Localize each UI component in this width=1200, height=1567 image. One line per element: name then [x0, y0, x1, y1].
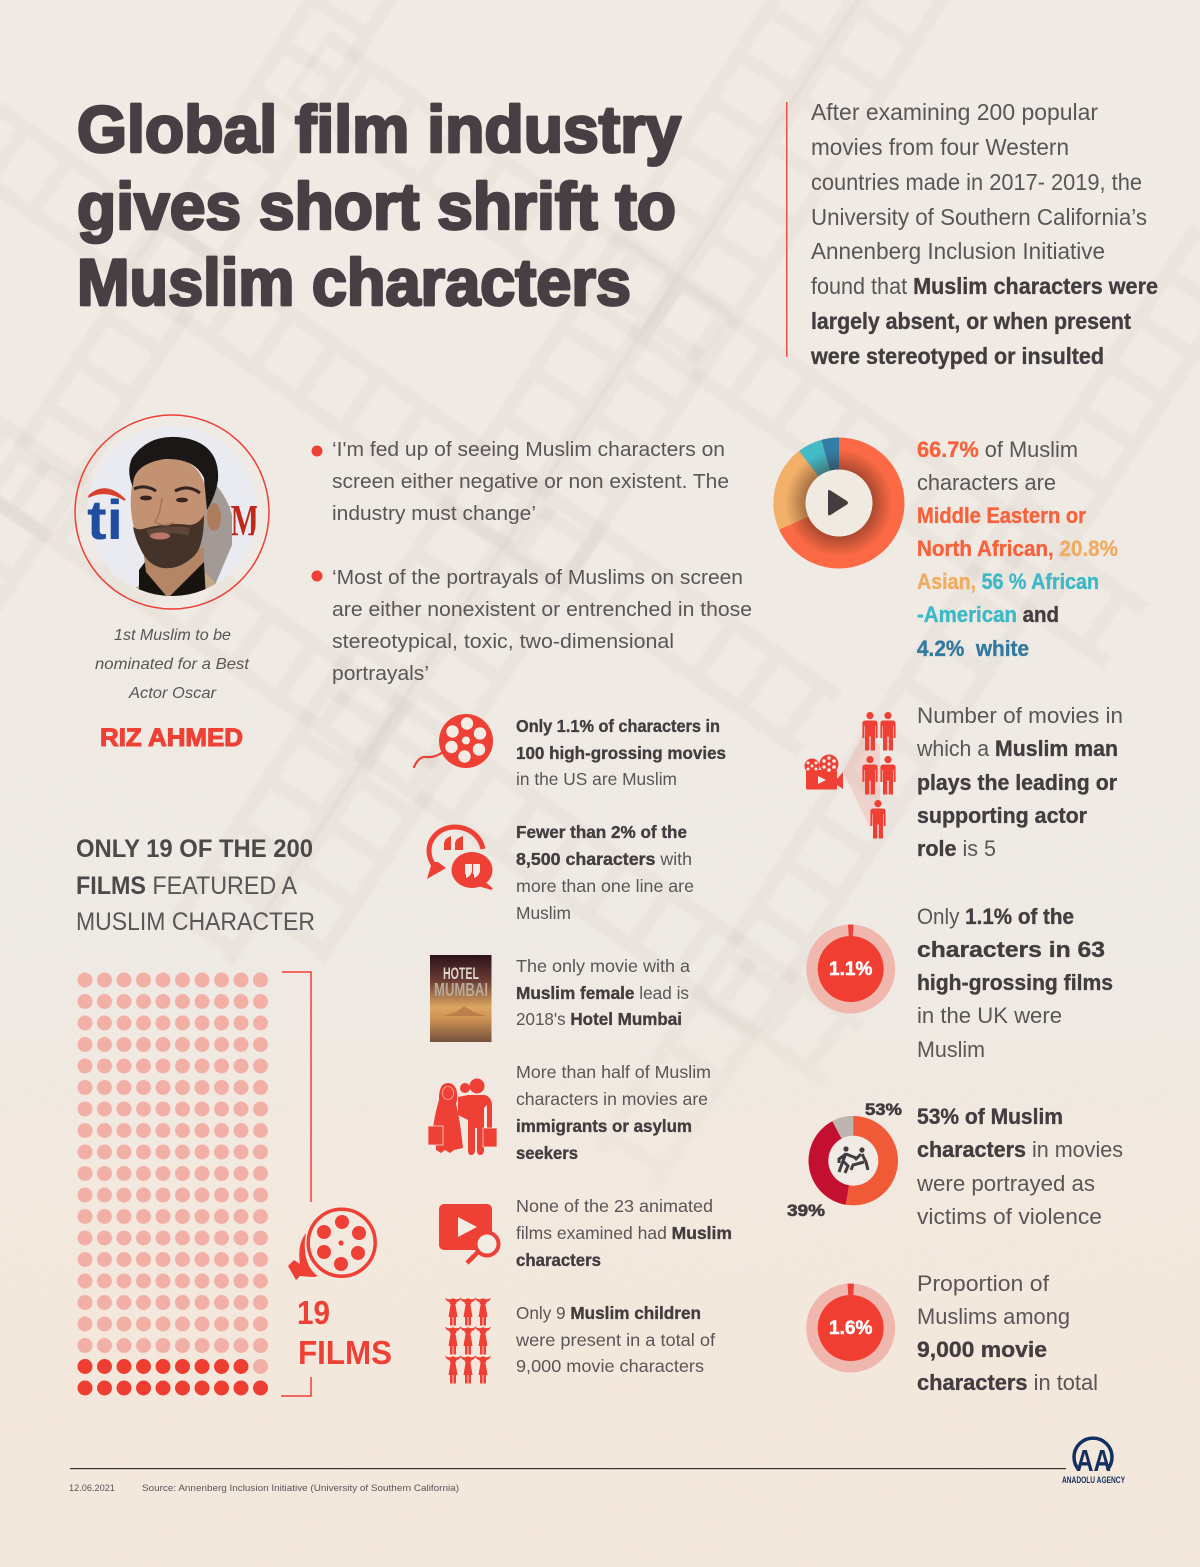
text: UK films: characters in 63 — [917, 937, 1105, 962]
text: US high-grossing: in the US are Muslim — [516, 769, 677, 789]
ethnicity text: -American and — [917, 602, 1059, 627]
ethnicity text: characters are — [917, 470, 1056, 495]
quotes: stereotypical, toxic, two-dimensional — [332, 631, 674, 653]
ethnicity text: North African, 20.8% — [917, 536, 1118, 561]
icon: video search — [439, 1204, 498, 1263]
text: violence: 53% of Muslim — [917, 1104, 1063, 1129]
heading: only 19 of 200 films: FILMS FEATURED A — [76, 872, 297, 900]
text: violence: victims of violence — [917, 1204, 1102, 1229]
donut: 1.1%: 1.1% — [829, 959, 872, 980]
caption: Riz Ahmed: nominated for a Best — [95, 656, 250, 673]
title: Muslim characters — [77, 245, 631, 319]
text: violence: characters in movies — [917, 1137, 1123, 1162]
text: immigrants: More than half of Muslim — [516, 1062, 711, 1082]
logo: Anadolu Agency — [1062, 1438, 1125, 1485]
text: Muslim female lead: The only movie with a — [516, 956, 690, 976]
intro text block: countries made in 2017- 2019, the — [811, 169, 1142, 195]
text: US high-grossing — [516, 716, 726, 789]
label: 19 films: FILMS — [298, 1334, 392, 1371]
intro text block: movies from four Western — [811, 134, 1069, 160]
bracket — [281, 972, 311, 1396]
footer source line: 12.06.2021 — [69, 1483, 115, 1494]
footer source line — [69, 1468, 1066, 1494]
logo: Anadolu Agency: AA — [1076, 1443, 1111, 1478]
intro text block — [786, 99, 1158, 369]
text: UK films: Only 1.1% of the — [917, 904, 1074, 929]
text: 8,500 characters: Fewer than 2% of the — [516, 822, 687, 842]
intro text block: After examining 200 popular — [811, 99, 1098, 125]
text: Muslim female lead — [516, 956, 690, 1029]
quotes — [312, 439, 752, 685]
text: Muslim female lead: Muslim female lead is — [516, 983, 689, 1003]
text: UK films — [917, 904, 1113, 1062]
text: proportion: characters in total — [917, 1370, 1098, 1395]
ethnicity text: 4.2% white — [917, 636, 1029, 661]
quotes: portrayals’ — [332, 663, 429, 685]
icon: film camera with five people — [804, 712, 896, 838]
donut: 1.6% — [806, 1284, 895, 1372]
text: Muslim man leading role: Number of movies in — [917, 703, 1123, 728]
ethnicity text: Middle Eastern or — [917, 503, 1086, 528]
quotes: are either nonexistent or entrenched in those — [332, 599, 752, 621]
text: animated films — [516, 1196, 732, 1270]
quotes: ‘Most of the portrayals of Muslims on screen — [332, 567, 743, 589]
text: proportion: Proportion of — [917, 1271, 1050, 1296]
poster: Hotel Mumbai: HOTEL — [443, 964, 479, 983]
text: Muslim man leading role — [916, 703, 1123, 861]
text: Muslim man leading role: supporting actor — [917, 803, 1087, 828]
intro text block: largely absent, or when present — [811, 308, 1131, 334]
icon: fighting figures — [839, 1146, 868, 1173]
donut: victims of violence: 53% — [865, 1100, 902, 1119]
text: animated films: films examined had Muslim — [516, 1223, 732, 1243]
dot matrix: 200 films — [75, 969, 270, 1396]
portrait photo: IM — [219, 496, 259, 545]
title: gives short shrift to — [77, 169, 676, 243]
portrait photo — [75, 415, 270, 610]
icon: film reel in hand — [288, 1209, 375, 1280]
text: Muslim children — [515, 1303, 715, 1376]
text: UK films: in the UK were — [917, 1003, 1062, 1028]
quotes: ‘I'm fed up of seeing Muslim characters on — [332, 439, 725, 461]
donut: 1.6%: 1.6% — [829, 1318, 872, 1339]
heading: only 19 of 200 films — [76, 835, 315, 936]
poster: Hotel Mumbai: MUMBAI — [434, 980, 488, 1000]
text: Muslim children: were present in a total of — [515, 1330, 715, 1350]
text: US high-grossing: Only 1.1% of characters in — [516, 716, 720, 736]
text: Muslim female lead: 2018's Hotel Mumbai — [516, 1009, 682, 1029]
ethnicity text — [917, 437, 1118, 661]
text: US high-grossing: 100 high-grossing movies — [516, 743, 726, 763]
donut chart: ethnicity with play button — [774, 438, 904, 568]
donut: 1.1% — [806, 924, 895, 1014]
heading: only 19 of 200 films: ONLY 19 OF THE 200 — [76, 835, 313, 863]
text: immigrants: characters in movies are — [516, 1089, 708, 1109]
intro text block: Annenberg Inclusion Initiative — [811, 238, 1105, 264]
text: violence — [916, 1104, 1123, 1229]
text: Muslim man leading role: which a Muslim man — [916, 736, 1118, 761]
text: violence: were portrayed as — [916, 1171, 1095, 1196]
heading: only 19 of 200 films: MUSLIM CHARACTER — [76, 908, 315, 936]
ethnicity text: Asian, 56 % African — [917, 569, 1099, 594]
intro text block: University of Southern California’s — [811, 204, 1147, 230]
text: proportion: Muslims among — [917, 1304, 1070, 1329]
quotes: industry must change’ — [332, 503, 536, 525]
portrait photo: ti — [87, 488, 123, 551]
logo: Anadolu Agency: ANADOLU AGENCY — [1062, 1475, 1125, 1485]
text: animated films: characters — [516, 1250, 601, 1270]
text: 8,500 characters: more than one line are — [516, 876, 694, 896]
title: Global film industry — [77, 92, 681, 166]
icon: speech bubbles — [427, 827, 492, 889]
footer source line: Source: Annenberg Inclusion Initiative (University of Southern California) — [142, 1483, 459, 1494]
text: Muslim man leading role: role is 5 — [917, 836, 996, 861]
text: proportion: 9,000 movie — [917, 1337, 1047, 1362]
text: UK films: high-grossing films — [917, 970, 1113, 995]
intro text block: found that Muslim characters were — [811, 273, 1158, 299]
text: immigrants: immigrants or asylum — [516, 1116, 692, 1136]
caption: Riz Ahmed: RIZ AHMED — [100, 724, 243, 752]
label: 19 films: 19 — [297, 1294, 330, 1331]
text: Muslim children: Only 9 Muslim children — [516, 1303, 701, 1323]
icon: film reel — [414, 714, 493, 768]
quotes: screen either negative or non existent. The — [332, 471, 729, 493]
text: 8,500 characters — [516, 822, 694, 923]
text: UK films: Muslim — [917, 1037, 985, 1062]
donut: victims of violence: 39% — [787, 1201, 825, 1220]
label: 19 films — [297, 1294, 392, 1371]
text: immigrants — [516, 1062, 711, 1163]
text: Muslim children: 9,000 movie characters — [516, 1356, 704, 1376]
intro text block: were stereotyped or insulted — [810, 343, 1104, 369]
text: proportion — [917, 1271, 1098, 1395]
text: 8,500 characters: Muslim — [516, 903, 571, 923]
icon: nine children — [445, 1298, 491, 1384]
caption: Riz Ahmed: Actor Oscar — [128, 685, 217, 702]
title — [77, 92, 681, 319]
text: Muslim man leading role: plays the leading or — [917, 770, 1117, 795]
text: immigrants: seekers — [516, 1143, 578, 1163]
text: animated films: None of the 23 animated — [516, 1196, 713, 1216]
donut: victims of violence — [787, 1100, 902, 1220]
poster: Hotel Mumbai — [430, 955, 492, 1042]
caption: Riz Ahmed: 1st Muslim to be — [114, 627, 231, 644]
icon: immigrant family — [428, 1078, 497, 1155]
caption: Riz Ahmed — [95, 627, 250, 752]
text: 8,500 characters: 8,500 characters with — [516, 849, 692, 869]
ethnicity text: 66.7% of Muslim — [917, 437, 1078, 462]
